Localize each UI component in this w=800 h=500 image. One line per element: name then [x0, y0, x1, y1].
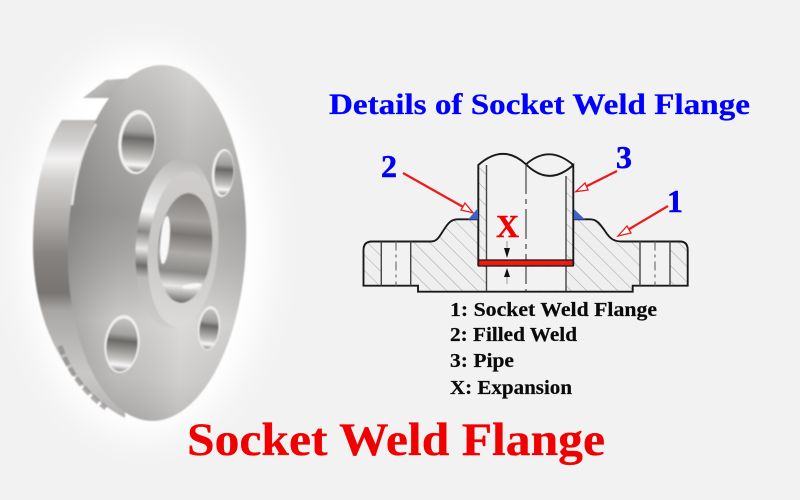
- label 2 and arrow: [381, 148, 473, 213]
- flange rim upper piece: [83, 78, 135, 98]
- pipe centre line: [525, 164, 527, 291]
- clear bolt hole and bore areas: [381, 242, 670, 290]
- weld left: [468, 208, 478, 220]
- flange outer rim: [33, 120, 130, 418]
- dimension arrow down: [504, 268, 510, 284]
- dimension arrow up: [504, 241, 510, 258]
- pipe walls: [479, 167, 572, 260]
- rim highlight edge: [72, 124, 96, 205]
- legend: 2: Filled Weld: [450, 324, 577, 346]
- vertical section lines: [381, 165, 670, 291]
- label X: X: [496, 208, 519, 244]
- flange outline left: [364, 219, 688, 292]
- flange section body: [364, 219, 688, 292]
- main title: Socket Weld Flange: [187, 414, 605, 466]
- bolt hole upper left: [116, 109, 158, 175]
- central socket bore: [153, 191, 217, 305]
- legend: 3: Pipe: [450, 350, 514, 372]
- cross-section diagram: [364, 139, 688, 292]
- bolt hole upper right: [210, 148, 236, 198]
- product photo: socket weld flange: [20, 48, 270, 438]
- bolt hole lower right: [196, 305, 222, 351]
- stamped markings: [60, 346, 106, 408]
- label 2 and arrow: 2: [381, 148, 397, 184]
- legend: [450, 299, 657, 399]
- bolt hole lower left: [102, 313, 142, 375]
- legend: 1: Socket Weld Flange: [450, 299, 657, 321]
- label 3 and arrow: 3: [616, 139, 632, 175]
- label 1 and arrow: 1: [667, 183, 683, 219]
- label 3 and arrow: [576, 139, 632, 192]
- flange front face: [62, 62, 252, 424]
- legend: X: Expansion: [450, 377, 572, 399]
- label 1 and arrow: [618, 183, 683, 236]
- expansion gap: [478, 260, 573, 266]
- bolt hole centre lines: [396, 242, 655, 286]
- weld right: [574, 209, 585, 220]
- pipe outline: [478, 154, 573, 266]
- raised hub: [129, 155, 225, 331]
- heading: details: Details of Socket Weld Flange: [329, 88, 750, 121]
